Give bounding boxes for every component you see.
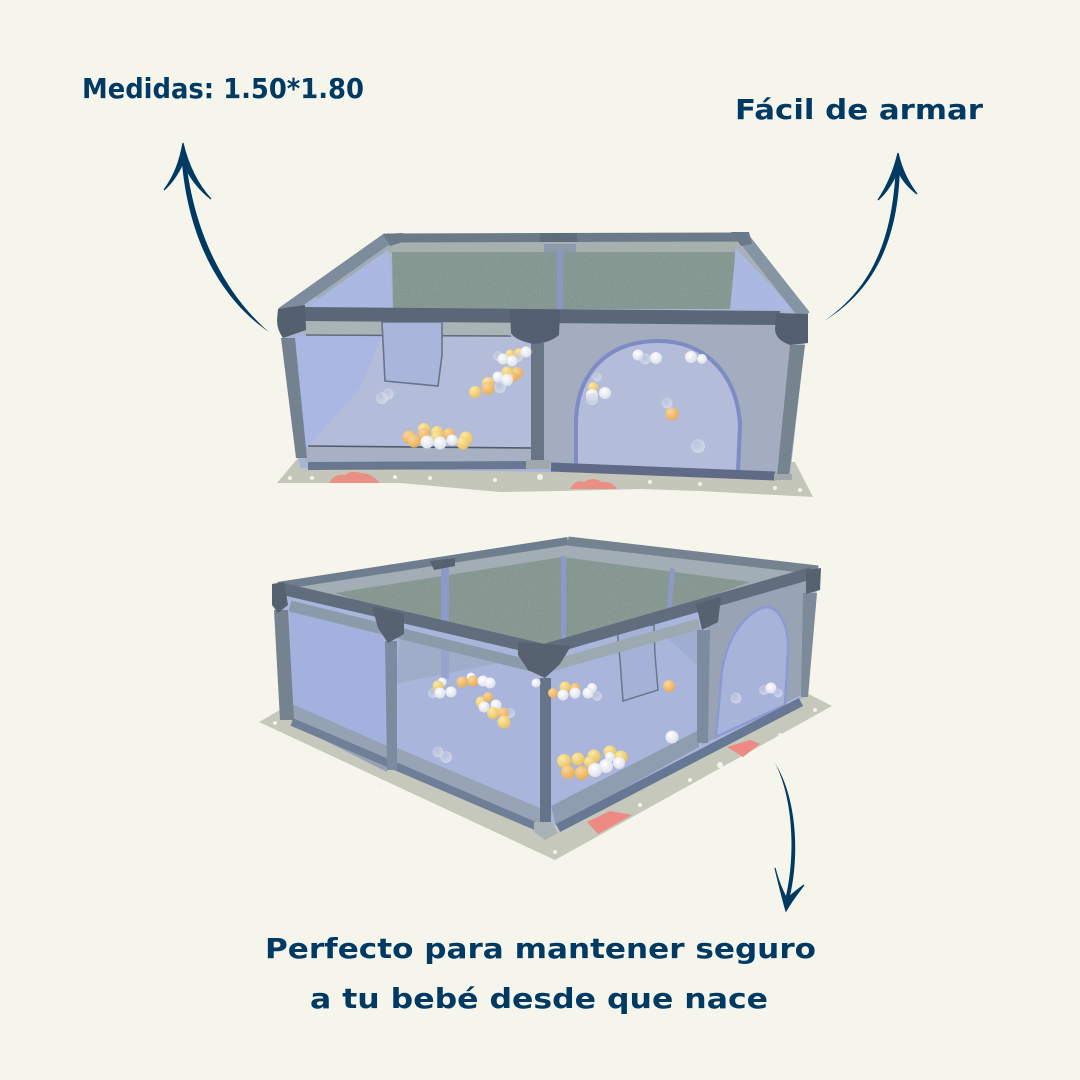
- back mesh wall: [386, 240, 738, 309]
- corner caps: [272, 558, 821, 678]
- arrow: up to fácil de armar: [824, 153, 917, 321]
- posts: [274, 593, 817, 840]
- pen silhouette: [279, 235, 808, 476]
- balls: [376, 346, 707, 453]
- arrow: down to caption: [775, 763, 804, 911]
- photo: playpen angled view: [259, 540, 832, 860]
- play mat: [259, 690, 832, 860]
- back mesh walls: [300, 545, 794, 644]
- mat dots: [273, 708, 817, 854]
- pen silhouette: [273, 540, 819, 830]
- posts: [281, 338, 805, 480]
- door arch: [716, 607, 788, 737]
- mat red shapes: [329, 472, 617, 489]
- photo: playpen front view: [277, 232, 813, 497]
- left mesh wall: [294, 336, 382, 450]
- caption line 2: a tu bebé desde que nace: [310, 982, 768, 1015]
- mat red shapes: [587, 740, 760, 834]
- rails: [278, 541, 818, 828]
- heading: fácil de armar: Fácil de armar: [735, 93, 983, 126]
- front left top strip: [303, 318, 511, 337]
- floor: [397, 624, 697, 806]
- lower back wall: [395, 632, 514, 684]
- front left mesh: [290, 608, 385, 750]
- lower strips: [292, 704, 699, 827]
- corner caps: [277, 232, 808, 345]
- mat dots: [288, 474, 802, 492]
- caption line 1: Perfecto para mantener seguro: [265, 932, 816, 965]
- arrow: up to medidas: [164, 143, 269, 332]
- rails: [282, 236, 805, 476]
- play mat: [277, 458, 813, 497]
- side walls upper: [308, 248, 795, 309]
- hanging pocket: [617, 625, 658, 701]
- right panel: [538, 318, 792, 474]
- heading: medidas: Medidas: 1.50*1.80: [82, 73, 364, 105]
- balls: [428, 672, 782, 780]
- right panel: [702, 576, 808, 745]
- floor: [305, 337, 531, 447]
- front left lower strip: [305, 447, 535, 463]
- caption: [265, 932, 816, 1015]
- door arch: [576, 341, 740, 472]
- hanging pocket: [382, 322, 442, 386]
